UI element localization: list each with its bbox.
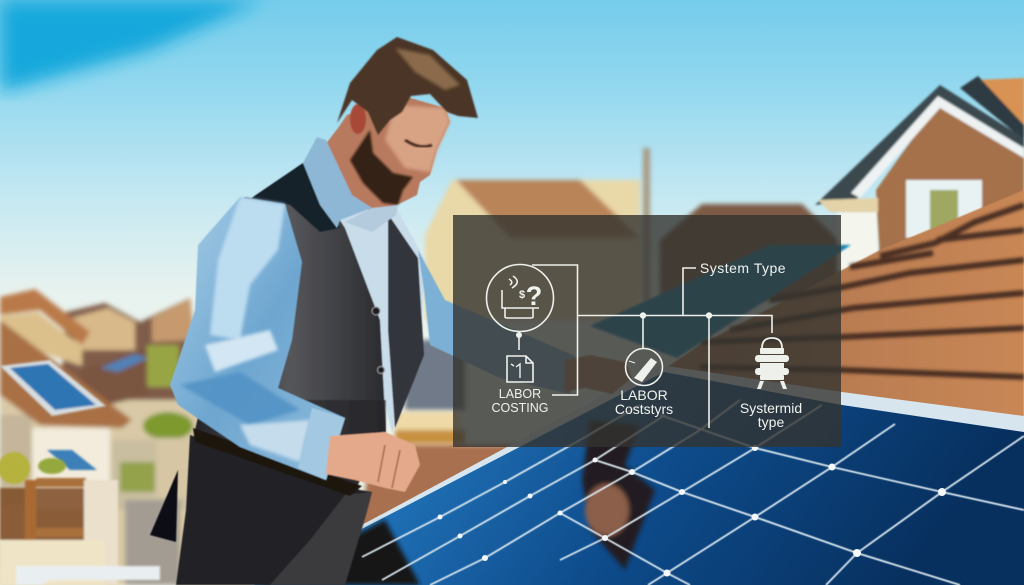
neck and face [325, 95, 450, 212]
connector dots [516, 312, 712, 338]
panel frame [250, 365, 1024, 585]
label: labor coststyrs: LABOR [620, 387, 668, 403]
label: system type: System Type [700, 260, 786, 276]
tiled roof [660, 190, 1024, 440]
man's reflection [258, 420, 655, 585]
icon: labor cost question [486, 264, 554, 332]
label: labor costing: LABOR [499, 387, 541, 401]
grid nodes [438, 445, 946, 576]
icon: tool in circle [626, 348, 662, 386]
background houses in the centre [395, 148, 878, 452]
label: labor costing: COSTING [492, 401, 548, 415]
rooftop solar panel on left house [0, 360, 106, 470]
icon: labor cost question: ? [526, 281, 542, 311]
man inspecting the panel [150, 37, 632, 585]
balcony railing and plants [0, 452, 160, 585]
hand on chest level [326, 432, 420, 492]
hand pointing at the panel [564, 355, 632, 394]
label: systermid type: Systermid [740, 400, 802, 416]
translucent diagram panel [453, 215, 841, 447]
connector diagram [486, 260, 802, 430]
panel grid lines [362, 400, 1024, 585]
roof tile shadows [700, 205, 1024, 377]
waistcoat [195, 163, 424, 490]
background houses on the left [0, 289, 260, 585]
right shirt sleeve [418, 250, 575, 394]
belt [193, 428, 362, 496]
upper-right house gable [815, 76, 1024, 260]
blue solar panel in distance [590, 245, 851, 358]
shirt collar [303, 137, 372, 228]
trousers and jacket tail [150, 435, 372, 585]
connector lines [519, 265, 772, 428]
lower roof behind panel [360, 445, 570, 545]
shirt front [335, 205, 425, 432]
hair [337, 37, 478, 135]
large solar panel [250, 365, 1024, 585]
icon: system stack [755, 338, 789, 389]
icon: labor cost question: $ [519, 289, 525, 301]
icon: document [507, 356, 533, 382]
label: labor coststyrs: Coststyrs [615, 401, 673, 417]
left shirt sleeve [170, 197, 345, 480]
label: systermid type: type [758, 414, 784, 430]
